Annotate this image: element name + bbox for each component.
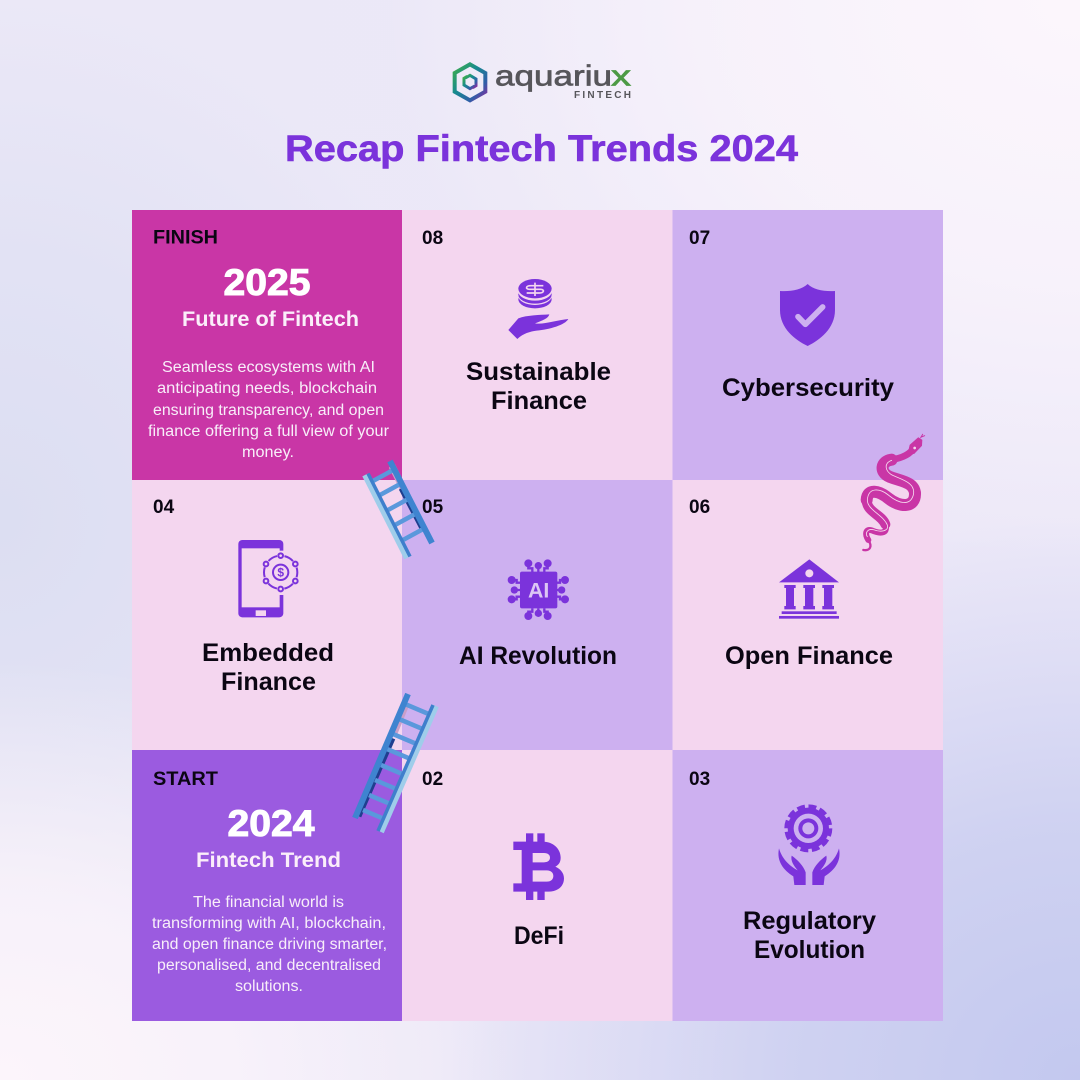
description: solutions. [235,978,303,995]
number: 03 [689,769,710,790]
icon: bank [779,559,839,619]
description: ensuring transparency, and open [153,402,384,419]
heading [202,639,334,696]
heading [743,907,876,964]
icon: AI chip: AI [528,579,549,603]
number: 08 [422,228,443,249]
heading: Open Finance [725,642,893,670]
snake [863,434,925,550]
heading: Evolution [754,936,865,964]
subtitle: Fintech Trend [196,849,341,872]
year 2025: 2025 [224,262,310,303]
description: anticipating needs, blockchain [157,380,377,397]
icon: bitcoin [513,833,564,900]
heading: Sustainable [466,358,611,386]
number: 07 [689,228,710,249]
panel: 03 regulatory evolution [672,750,943,1021]
number: 06 [689,497,710,518]
ladder: start to 05 [355,694,436,832]
heading: Embedded [202,639,334,667]
heading: AI Revolution [459,642,617,670]
panel: 06 open finance [672,480,943,750]
number: 04 [153,497,175,518]
description: transforming with AI, blockchain, [152,915,386,932]
description [152,894,387,995]
year 2024: 2024 [228,803,315,844]
number: 02 [422,769,443,790]
title: Recap Fintech Trends 2024 [285,128,798,169]
ladder: finish to 05 [365,461,432,558]
heading: Finance [221,668,316,696]
description: personalised, and decentralised [157,957,381,974]
heading: Cybersecurity [722,374,894,402]
subtitle: Future of Fintech [182,308,359,331]
heading [466,358,611,415]
panel: 02 DeFi [402,750,672,1021]
wordmark sub: FINTECH [574,90,631,101]
wordmark: aquariu [495,60,612,92]
heading: DeFi [514,922,564,950]
icon: phone with dollar network [238,540,298,617]
heading: Finance [491,387,587,415]
heading: Regulatory [743,907,876,935]
icon: AI chip [508,559,569,620]
panel: start 2024 [132,750,402,1021]
icon: hexagon mark [455,64,485,100]
wordmark x: x [611,60,632,92]
description: finance offering a full view of your [148,423,389,440]
panel: finish 2025 [132,210,402,480]
description [148,359,389,461]
description: money. [242,444,294,461]
number: 05 [422,497,444,518]
icon: shield [780,284,835,346]
panel: 04 embedded finance [132,480,402,750]
label: start: START [153,769,218,790]
icon: gear in hands [778,807,840,885]
description: and open finance driving smarter, [152,936,387,953]
panel: 05 AI revolution [402,480,672,750]
panel: 07 cybersecurity [672,210,943,480]
icon: coins in hand [508,279,568,339]
description: Seamless ecosystems with AI [162,359,375,376]
description: The financial world is [193,894,344,911]
panel: 08 sustainable finance [402,210,672,480]
label: finish: FINISH [153,228,218,248]
icon: phone with dollar network: $ [277,566,284,580]
logo: Aquariux Fintech [455,60,632,101]
